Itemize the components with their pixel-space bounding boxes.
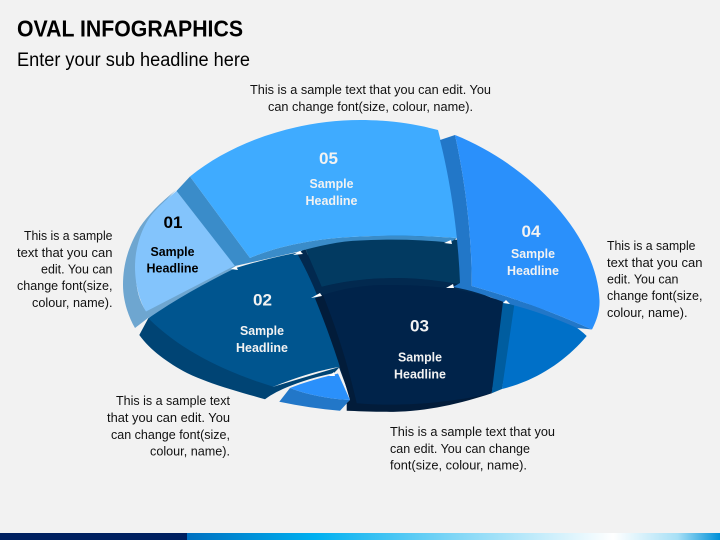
inner back top face <box>305 235 461 287</box>
segment 05 headline <box>306 177 358 208</box>
segment 05 side <box>176 176 457 266</box>
segment 01 headline: Sample <box>150 245 195 259</box>
text block: bottom left <box>107 393 230 458</box>
diagram backing <box>300 246 503 402</box>
text block: left: change font(size, <box>17 278 112 293</box>
segment 04 side <box>440 135 592 330</box>
segment 01 headline: Headline <box>146 262 199 276</box>
segment 05 number: 05 <box>319 149 338 168</box>
segment 02 number: 02 <box>253 291 272 310</box>
segment 05 <box>176 120 457 266</box>
segment 04 <box>440 135 600 330</box>
segment 03 <box>315 285 503 412</box>
segment 02 headline: Sample <box>240 324 284 338</box>
oval diagram <box>123 120 600 412</box>
inner back segment <box>297 235 470 300</box>
text block: bottom: This is a sample text that you <box>390 424 555 439</box>
segment 02 top face <box>148 253 340 387</box>
segment 02 <box>139 253 340 399</box>
text block: left: text that you can <box>17 245 112 260</box>
tiny white gaps <box>231 240 510 376</box>
fragment top face <box>290 374 350 400</box>
text block: right: colour, name). <box>607 305 688 320</box>
lower right segment <box>492 298 587 393</box>
segment 02 headline <box>236 324 288 355</box>
title: OVAL INFOGRAPHICS <box>17 16 243 42</box>
segment 03 number: 03 <box>410 317 429 336</box>
segment 03 headline: Sample <box>398 351 442 365</box>
segment 02 headline: Headline <box>236 341 288 355</box>
text block: right: edit. You can <box>607 272 678 286</box>
text block: bottom <box>390 424 555 472</box>
segment 01 top face <box>135 191 235 312</box>
segment 03 headline <box>394 351 446 382</box>
text block: right: text that you can <box>607 255 702 270</box>
segment 04 headline: Sample <box>511 247 555 261</box>
segment 04 headline: Headline <box>507 264 559 278</box>
subtitle: Enter your sub headline here <box>17 50 250 71</box>
segment 02 side <box>139 318 340 399</box>
text block: bottom: font(size, colour, name). <box>390 458 527 472</box>
segment 04 top face <box>455 135 600 330</box>
segment 05 top face <box>190 120 457 258</box>
segment 01 number: 01 <box>164 213 182 232</box>
segment 05 headline: Headline <box>306 194 358 208</box>
segment 01 headline <box>146 245 199 276</box>
text block: bottom left: that you can edit. You <box>107 410 230 425</box>
text block: left <box>17 228 112 310</box>
lower right top face <box>502 300 587 389</box>
text block: left: colour, name). <box>32 295 112 310</box>
text block: left: This is a sample <box>24 228 112 243</box>
text block: bottom: can edit. You can change <box>390 441 530 456</box>
text block: right <box>607 238 702 320</box>
segment 05 headline: Sample <box>310 177 354 191</box>
text block: bottom left: colour, name). <box>150 444 230 458</box>
segment 01 <box>123 190 240 328</box>
text block: left: edit. You can <box>41 262 112 276</box>
segment 03 top face <box>323 285 503 405</box>
text block: top <box>250 82 491 114</box>
text block: bottom left: can change font(size, <box>111 427 230 442</box>
segment 03 headline: Headline <box>394 368 446 382</box>
text block: top: can change font(size, colour, name). <box>268 99 473 114</box>
fragment side <box>279 388 350 411</box>
inner back side <box>297 248 470 300</box>
segment 04 number: 04 <box>522 222 541 241</box>
text block: right: This is a sample <box>607 238 696 253</box>
segment 03 side <box>315 295 492 412</box>
text block: top: This is a sample text that you can edit. You <box>250 82 491 97</box>
segment 04 headline <box>507 247 559 278</box>
lower right side <box>492 298 518 393</box>
text block: bottom left: This is a sample text <box>116 393 230 408</box>
segment 01 side <box>123 190 240 328</box>
footer bar <box>0 533 720 540</box>
text block: right: change font(size, <box>607 288 702 303</box>
small fragment <box>279 374 350 411</box>
